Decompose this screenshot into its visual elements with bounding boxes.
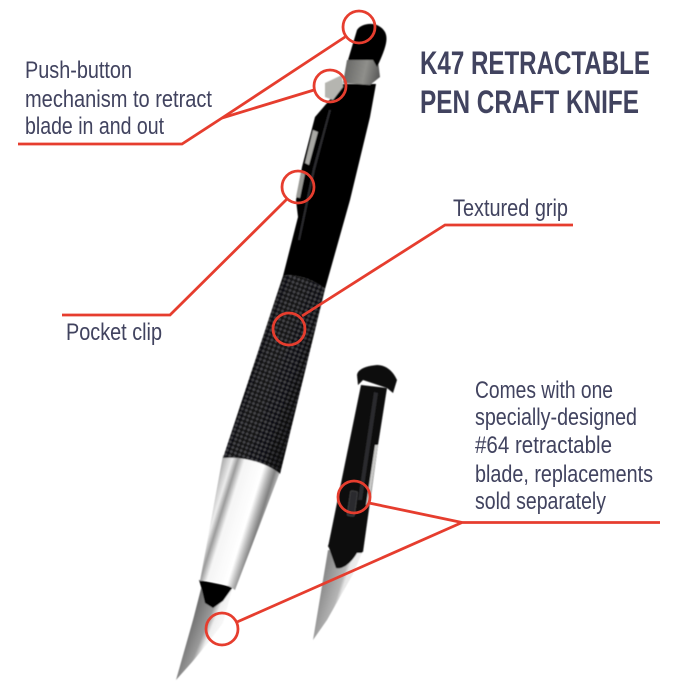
push-button cap xyxy=(348,24,386,67)
text: push-button mechanism xyxy=(25,57,212,140)
text: push-button mechanism: blade in and out xyxy=(25,113,164,140)
text: push-button mechanism: mechanism to retract xyxy=(25,86,212,113)
callout: pocket clip leader xyxy=(62,171,314,315)
text: push-button mechanism: Push-button xyxy=(25,57,132,84)
blade holder shadow xyxy=(199,580,233,608)
text: blade description: Comes with one xyxy=(475,377,613,404)
callout: blade leaders xyxy=(206,481,660,645)
text: blade description: blade, replacements xyxy=(475,461,653,488)
carrier head xyxy=(357,365,397,393)
callout: textured grip leader xyxy=(273,225,573,345)
blade shank xyxy=(328,540,364,568)
pen blade xyxy=(176,585,232,680)
text: textured grip: Textured grip xyxy=(453,195,568,222)
knurled grip xyxy=(223,275,325,474)
push-button tab xyxy=(325,75,343,100)
text: blade description: sold separately xyxy=(475,488,606,515)
icon: replacement blade xyxy=(313,365,397,640)
blade carrier xyxy=(328,385,387,552)
icon: pen craft knife xyxy=(176,24,386,680)
pocket clip xyxy=(305,130,318,165)
collar xyxy=(343,60,380,85)
title: PEN CRAFT KNIFE xyxy=(420,84,639,120)
callout: push-button leaders xyxy=(18,11,375,144)
text: blade description xyxy=(475,377,653,515)
text: blade description: specially-designed xyxy=(475,404,637,431)
text: pocket clip: Pocket clip xyxy=(66,319,162,346)
text: blade description: #64 retractable xyxy=(475,432,612,459)
title xyxy=(420,45,650,120)
small blade edge xyxy=(313,550,362,640)
pen barrel xyxy=(283,84,376,289)
metal ferrule xyxy=(200,455,280,590)
carrier slot xyxy=(347,491,358,516)
